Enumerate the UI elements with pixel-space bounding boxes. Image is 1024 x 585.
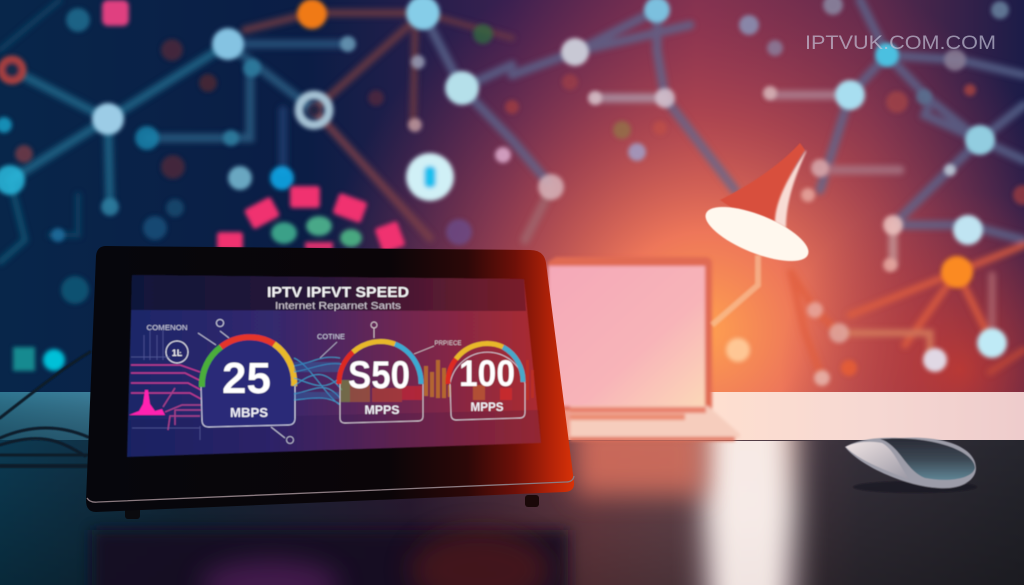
light reflection [700, 410, 800, 585]
screen panel [127, 275, 541, 457]
nodes: small blue [0, 0, 1009, 386]
desk effects [87, 441, 819, 585]
lamp shade [720, 143, 805, 235]
node: orange top [297, 0, 327, 29]
desk lamp [699, 143, 815, 325]
desk back band [0, 392, 1024, 441]
laptop [548, 257, 740, 441]
pink mountain icon [129, 390, 165, 415]
mouse top [880, 438, 975, 480]
screen title: IPTV IPFVT SPEED [267, 285, 409, 301]
label: common: COMENON [146, 325, 188, 332]
teal blocks left [13, 347, 65, 371]
lamp highlight [775, 150, 806, 228]
gauge 25 unit: MBPS [230, 406, 268, 420]
left badge icon [166, 341, 188, 363]
gauge 100 unit: MPPS [470, 400, 504, 414]
label: prepace: PRPIECE [434, 340, 462, 347]
gauge 100 arcs [448, 344, 523, 384]
tablet body [86, 246, 574, 512]
node: pink [102, 0, 129, 26]
gauge 50 [339, 342, 423, 423]
left circuit lines [131, 365, 201, 430]
network diagram background [0, 0, 1024, 378]
tablet reflection [92, 530, 568, 585]
laptop lid [548, 257, 712, 410]
nodes: large light blue [92, 0, 1007, 372]
tablet feet [125, 505, 140, 519]
node: cyan core [406, 153, 454, 201]
screen vertical fade [127, 410, 541, 457]
screen header [131, 275, 526, 311]
gauge 100 [448, 344, 525, 420]
wireless mouse [845, 438, 977, 493]
label: cotine: COTINE [317, 334, 345, 341]
dim coloured dots [15, 24, 1024, 376]
gauge 25 arcs [202, 337, 294, 387]
gauge 100 box [450, 352, 525, 420]
gauge 50 box [340, 342, 423, 423]
gauge 50 unit: MPPS [364, 403, 400, 417]
left badge icon: 1Ŀ [172, 348, 183, 358]
mouse body [845, 438, 976, 488]
lamp arm [712, 255, 758, 325]
desk surface [0, 440, 1024, 585]
gauge 100 value: 100 [459, 353, 515, 394]
equalizer bars [424, 360, 534, 400]
laptop base [570, 406, 740, 441]
gauge top dot [371, 322, 377, 338]
gauge 50 arcs [339, 342, 421, 384]
network nodes [0, 0, 1024, 386]
gauge top icon [216, 319, 224, 327]
network links: blue [0, 0, 348, 262]
red glow on desk [575, 420, 705, 495]
tablet bezel highlight [87, 476, 574, 502]
network links: grey [423, 0, 1024, 265]
laptop screen [548, 266, 705, 406]
bottom callout icon [271, 427, 294, 444]
lamp opening [699, 196, 815, 272]
pink and green cluster [217, 186, 406, 253]
tablet screen [127, 275, 541, 457]
node: ring white [299, 95, 329, 125]
gauge 50 value: S50 [348, 354, 410, 397]
wave ribbon between gauges [294, 357, 342, 405]
gauge 25 [201, 337, 295, 427]
node: red ring [1, 59, 23, 81]
watermark: IPTVUK.COM.COM [805, 33, 996, 54]
gauge 25 box [201, 337, 295, 427]
cable [0, 352, 90, 466]
equalizer bars 50 [340, 380, 422, 402]
screen subtitle: Internet Reparnet Sants [275, 301, 401, 312]
network links: brown [245, 13, 512, 238]
network links: orange [790, 245, 1024, 378]
tablet device [86, 246, 574, 519]
mouse front [845, 442, 910, 480]
gauge 25 value: 25 [222, 354, 271, 403]
background wall [0, 0, 1024, 395]
mouse shadow [853, 481, 977, 493]
left axis marks [131, 330, 200, 440]
node: orange right [941, 256, 973, 288]
